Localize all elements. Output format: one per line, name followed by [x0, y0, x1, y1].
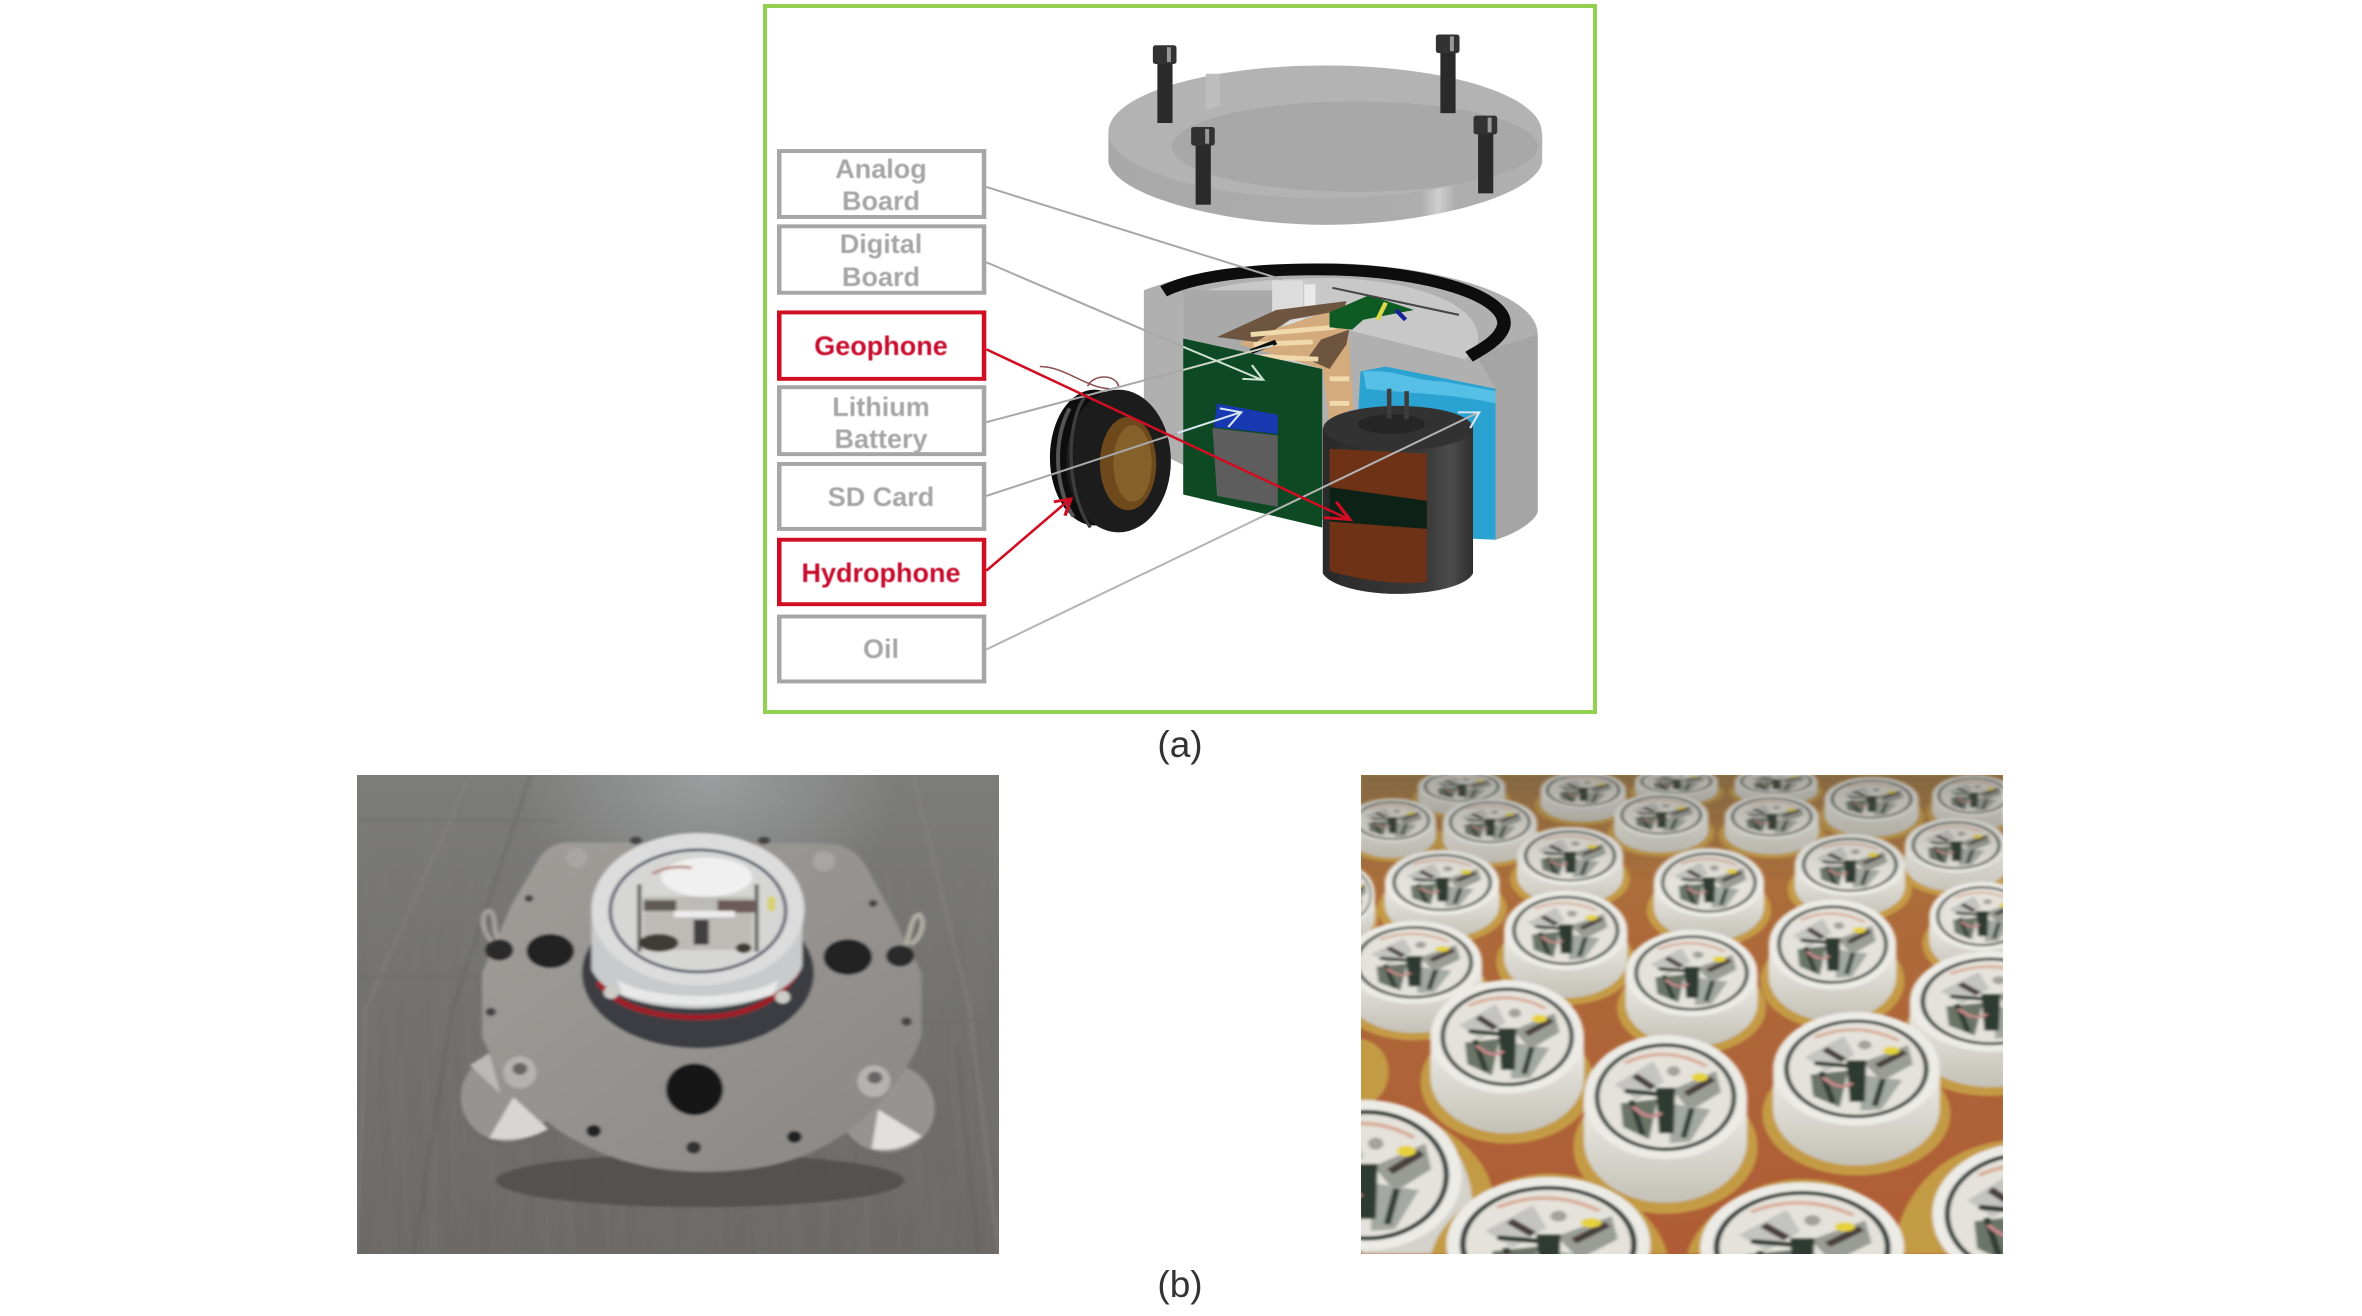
label box: digital board — [779, 226, 984, 293]
left foot — [460, 1053, 554, 1147]
label: Analog Board: Board — [842, 186, 920, 216]
leader line: SD card — [986, 408, 1241, 496]
red arrow: hydrophone — [986, 499, 1071, 571]
photo: array of assembled sensors — [1361, 775, 2003, 1254]
label box: lithium battery — [779, 387, 984, 454]
leader line: digital board — [986, 262, 1263, 380]
leader line: analog board — [986, 187, 1282, 279]
label: Analog Board: Analog — [835, 154, 927, 184]
label: Digital Board: Board — [842, 262, 920, 292]
analog board — [1330, 288, 1459, 330]
right foot — [839, 1063, 935, 1159]
label box: geophone — [779, 312, 984, 379]
label: Geophone: Geophone — [814, 331, 948, 361]
bolt holes — [486, 895, 912, 1154]
hex bolts — [503, 837, 890, 1097]
leader line: lithium battery — [986, 345, 1273, 422]
panel (a): exploded sensor diagram frame — [765, 6, 1595, 712]
transparent sensor housing — [592, 833, 804, 1008]
back row of sensors — [1343, 768, 2020, 867]
caption (a): (a) — [1157, 724, 1203, 765]
mounting plate — [482, 842, 922, 1172]
lid with four bolts — [1108, 34, 1542, 225]
third row of sensors — [1337, 882, 2042, 1054]
geophone cylinder — [1323, 389, 1473, 594]
upper-row shading — [1361, 775, 2003, 881]
sensor base flange — [582, 898, 814, 1048]
diagram (a): cutaway sensor illustration — [777, 34, 1542, 684]
label: SD Card: SD Card — [828, 482, 934, 512]
label: Lithium Battery — [832, 392, 930, 454]
oil — [1358, 367, 1496, 540]
floor planks — [357, 775, 999, 1254]
digital board — [1183, 339, 1322, 527]
photo: assembled sensor on mounting plate — [357, 775, 999, 1254]
label box: oil — [779, 616, 984, 681]
second row of sensors — [1319, 818, 2014, 948]
red arrow: geophone — [986, 349, 1350, 520]
SD card — [1213, 403, 1278, 507]
label: Digital Board — [840, 229, 922, 292]
diagram labels — [802, 154, 960, 664]
label: Hydrophone: Hydrophone — [802, 558, 960, 588]
label: Oil: Oil — [863, 634, 899, 664]
hydrophone disk — [1040, 367, 1171, 532]
lithium battery pack — [1217, 301, 1353, 423]
label: Analog Board — [835, 154, 927, 216]
label: Lithium Battery: Battery — [834, 424, 928, 454]
eye bolts — [483, 911, 923, 967]
red sealing ring — [598, 969, 798, 1017]
label box: SD card — [779, 464, 984, 529]
caption (b): (b) — [1157, 1264, 1203, 1305]
housing cutaway body — [1144, 263, 1538, 540]
label: Lithium Battery: Lithium — [832, 392, 930, 422]
leader line: oil — [986, 412, 1479, 649]
label: Digital Board: Digital — [840, 229, 922, 259]
front rows of sensors — [1271, 951, 2119, 1314]
label box: analog board — [779, 151, 984, 217]
label box: hydrophone — [779, 540, 984, 604]
plate shadow — [496, 1154, 904, 1207]
